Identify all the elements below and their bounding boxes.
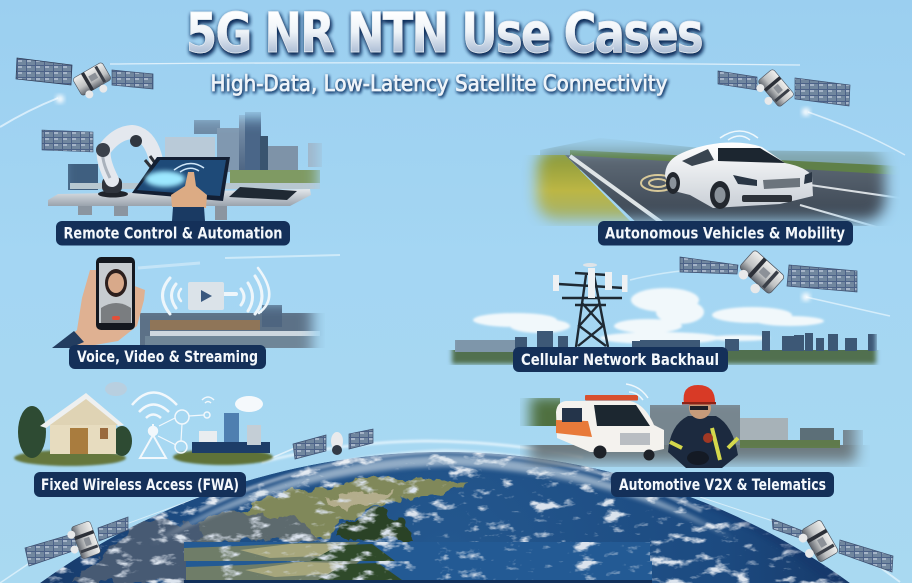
label: automotive v2x [611,472,834,497]
label: automotive v2x: Automotive V2X & Telematics [619,475,826,494]
road scene [520,138,900,228]
cell tower [553,263,628,347]
panel: cellular network backhaul [445,263,885,365]
table [48,189,311,220]
icon: satellite bottom left [25,517,128,566]
solar panel [42,130,93,152]
wi-fi tower and network nodes [132,392,214,458]
phone [96,257,135,330]
solar and server blocks [192,413,270,453]
label: voice video [69,345,266,369]
icon: satellite top left [16,58,153,103]
city strip [140,305,325,348]
tablet [132,157,230,201]
label: cellular backhaul [513,347,728,372]
hand holding phone [60,270,145,345]
title: 5G NR NTN Use Cases [186,1,702,65]
trees [18,406,132,458]
panel: autonomous vehicles [520,131,900,228]
earth globe [40,445,860,583]
signal arcs over the car [720,131,758,140]
clouds [473,288,824,344]
signal arc [626,384,648,400]
subtitle: High-Data, Low-Latency Satellite Connectivity [210,72,668,97]
icon: satellite middle right [680,249,857,302]
city backdrop [68,112,322,190]
ground [14,450,126,466]
skyline [445,331,885,365]
road marker rings [641,175,675,191]
label: autonomous vehicles: Autonomous Vehicles & Mobility [605,224,845,242]
car [665,142,813,209]
streaming waves and play button [162,268,269,314]
label: fixed wireless access [34,472,246,497]
panel: fixed wireless access [14,382,273,466]
label: remote control [56,221,290,246]
label: fixed wireless access: Fixed Wireless Access (FWA) [41,475,239,494]
firefighter [668,385,738,468]
panel: automotive v2x and telematics [520,384,870,468]
atmosphere arc [200,441,700,510]
icon: satellite top right [718,69,850,113]
background scene [520,398,870,467]
clouds [105,382,263,412]
panel: remote control and automation [42,112,322,221]
panel: voice video and streaming [52,257,325,348]
robot arm [96,132,160,198]
glitch band at the bottom of the globe [184,542,652,583]
label: cellular backhaul: Cellular Network Backhaul [521,350,719,369]
label: autonomous vehicles [598,221,853,246]
icon: satellite above earth [293,429,373,459]
label: voice video: Voice, Video & Streaming [77,347,258,366]
keyboard [229,187,297,200]
ambulance [556,395,664,460]
house [40,393,124,454]
icon: satellite bottom right [772,519,893,572]
label: remote control: Remote Control & Automation [64,224,282,242]
hand [171,172,207,221]
